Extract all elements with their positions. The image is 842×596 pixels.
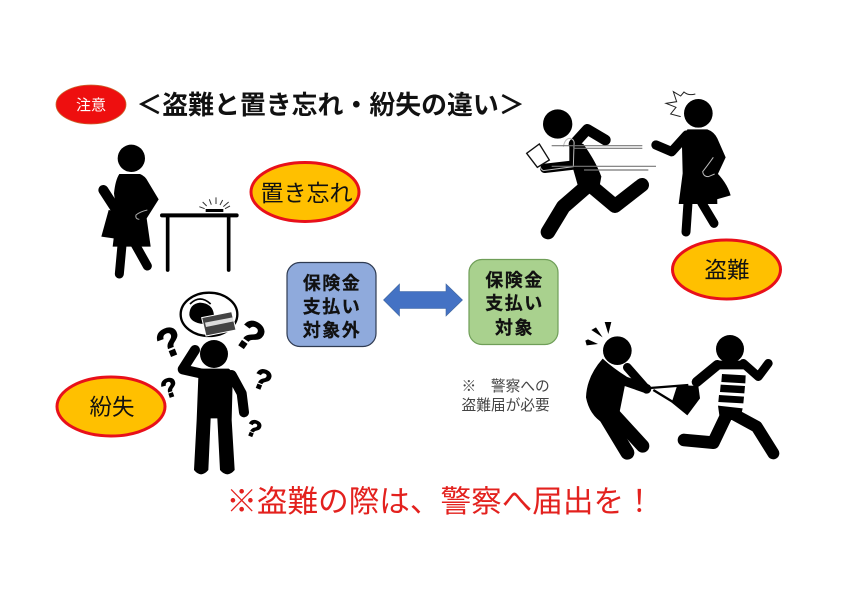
box: covered by insurance: 支払い (485, 294, 544, 314)
label: theft (672, 240, 780, 299)
icons: question marks: ? (150, 318, 189, 368)
icons: question marks: ? (157, 371, 182, 405)
label: misplaced: 置き忘れ (260, 180, 352, 206)
icon: table with phone (162, 197, 237, 270)
icon: confused man with lost items (150, 293, 276, 474)
box: not covered by insurance (287, 262, 376, 346)
box: covered by insurance: 保険金 (485, 270, 544, 290)
icon: victim (585, 322, 647, 453)
icon: bag snatching scene (585, 322, 773, 453)
label: theft: 盗難 (704, 258, 750, 283)
box: covered by insurance (469, 260, 558, 344)
note: police report required: ※ 警察への (462, 378, 550, 395)
title: ＜盗難と置き忘れ・紛失の違い＞ (136, 91, 525, 120)
badge: caution: 注意 (76, 97, 106, 114)
box: covered by insurance: 対象 (495, 318, 534, 338)
arrow: double-headed (384, 284, 462, 316)
icons: question marks (150, 309, 276, 443)
badge: caution (56, 85, 126, 124)
icon: thief in striped shirt (684, 335, 773, 453)
box: not covered by insurance: 保険金 (303, 274, 361, 294)
label: lost (57, 377, 165, 436)
label: lost: 紛失 (89, 395, 135, 420)
icon: startled woman (656, 92, 731, 232)
warning message: ※盗難の際は、警察へ届出を！ (226, 485, 655, 519)
icon: thought bubble with purse and card (181, 293, 237, 336)
icons: question marks: ? (226, 309, 274, 362)
note: police report required (462, 378, 550, 414)
icon: thief running with phone (527, 109, 656, 232)
note: police report required: 盗難届が必要 (462, 397, 550, 414)
icons: question marks: ? (242, 414, 265, 443)
icon: woman leaving phone on table (101, 145, 237, 274)
label: misplaced (251, 162, 359, 222)
icons: question marks: ? (248, 362, 276, 398)
box: not covered by insurance: 支払い (303, 297, 361, 317)
box: not covered by insurance: 対象外 (303, 320, 361, 340)
icon: snatched bag (650, 385, 700, 415)
